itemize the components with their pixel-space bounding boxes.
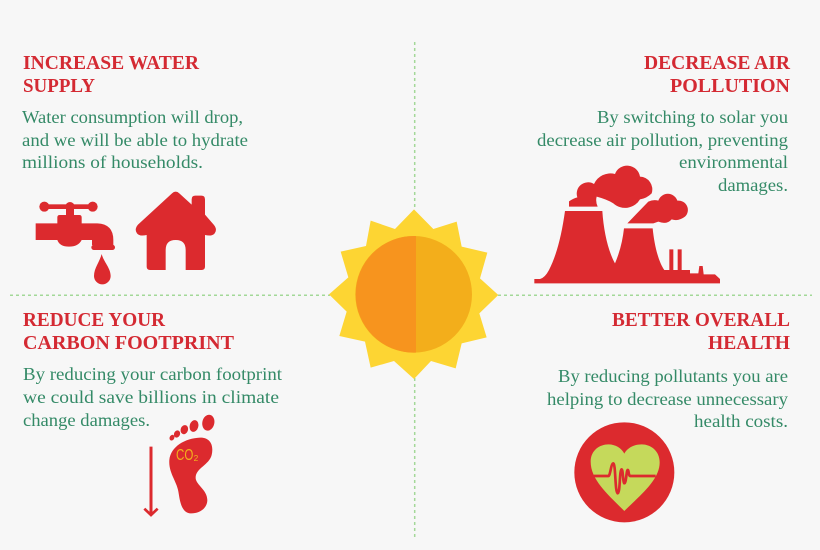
- icon: footprint with CO2: CO: [176, 447, 193, 464]
- text: switching to solar: environmental: [679, 152, 788, 172]
- heading: decrease air pollution: DECREASE AIR: [644, 52, 791, 74]
- text: switching to solar: [537, 107, 788, 195]
- icon: footprint with CO2: [168, 414, 216, 513]
- heading: increase water supply: SUPPLY: [23, 75, 96, 97]
- sun: [329, 209, 498, 379]
- panel: reduce carbon footprint: [23, 309, 282, 515]
- heading: better overall health: BETTER OVERALL: [612, 309, 790, 331]
- text: reducing pollutants: [547, 366, 788, 431]
- text: reducing pollutants: By reducing pollutants you are: [558, 366, 788, 386]
- sun disc: [355, 236, 472, 353]
- text: water consumption: and we will be able to hydrate: [22, 130, 248, 150]
- heading: increase water supply: [23, 52, 200, 97]
- text: switching to solar: damages.: [718, 175, 788, 195]
- panel: decrease air pollution: [534, 52, 791, 283]
- heading: reduce your carbon footprint: [23, 309, 235, 354]
- text: switching to solar: By switching to solar you: [597, 107, 788, 127]
- text: reducing carbon footprint: change damages.: [23, 410, 150, 430]
- icon: house: [136, 192, 216, 270]
- heading: decrease air pollution: [644, 52, 791, 97]
- heading: reduce your carbon footprint: CARBON FOOTPRINT: [23, 332, 235, 354]
- icon: heart with pulse: [574, 422, 674, 522]
- heading: reduce your carbon footprint: REDUCE YOUR: [23, 309, 166, 331]
- text: switching to solar: decrease air pollution, preventing: [537, 130, 788, 150]
- text: water consumption: millions of households.: [22, 152, 203, 172]
- text: reducing carbon footprint: By reducing your carbon footprint: [23, 364, 282, 384]
- text: reducing carbon footprint: we could save billions in climate: [23, 387, 279, 407]
- panel: better overall health: [547, 309, 790, 522]
- sun rays: [329, 209, 498, 379]
- panel: increase water supply: [22, 52, 248, 284]
- text: water consumption: Water consumption will drop,: [22, 107, 243, 127]
- heading: better overall health: [612, 309, 790, 354]
- heading: better overall health: HEALTH: [708, 332, 790, 354]
- heading: increase water supply: INCREASE WATER: [23, 52, 200, 74]
- text: reducing carbon footprint: [23, 364, 282, 430]
- icon: down arrow: [144, 447, 158, 515]
- text: water consumption: [22, 107, 248, 172]
- icon: footprint with CO2: 2: [194, 453, 199, 463]
- icon: dripping tap: [36, 202, 115, 284]
- heading: decrease air pollution: POLLUTION: [670, 75, 791, 97]
- text: reducing pollutants: health costs.: [694, 411, 788, 431]
- text: reducing pollutants: helping to decrease unnecessary: [547, 389, 788, 409]
- icon: power plant with smoke: [534, 166, 720, 283]
